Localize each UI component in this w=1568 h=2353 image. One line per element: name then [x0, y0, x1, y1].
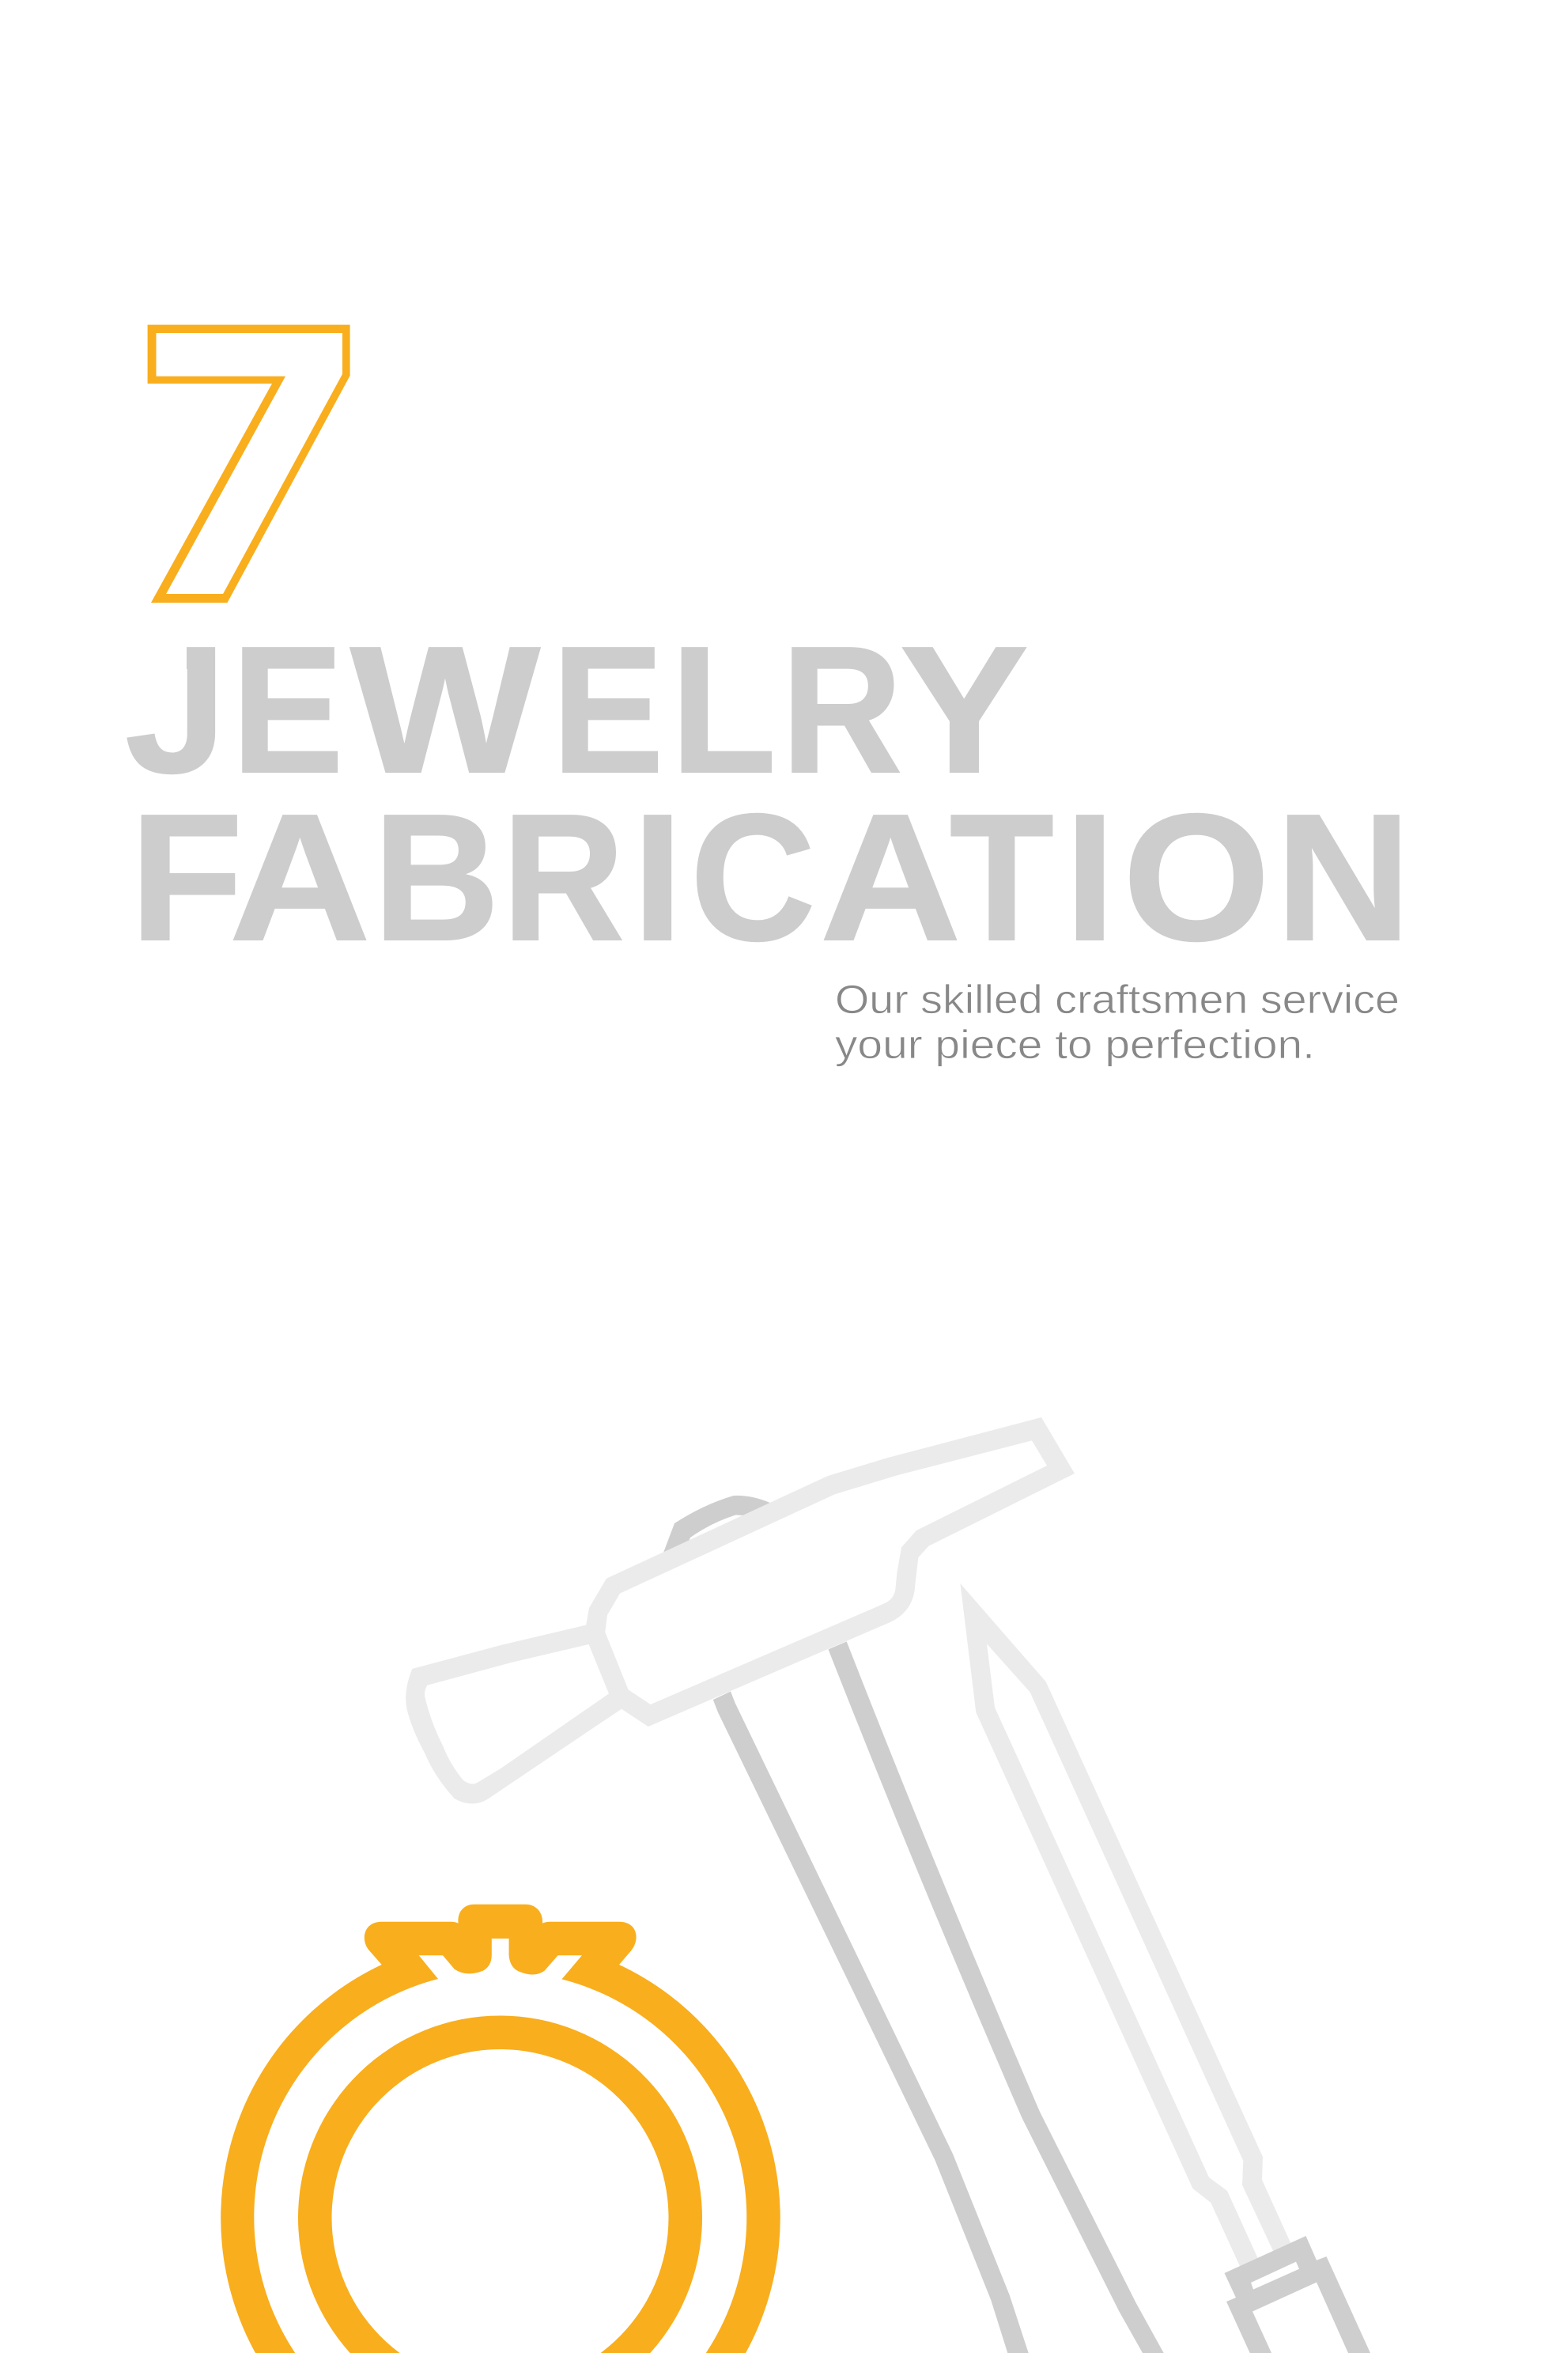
description text [835, 977, 1400, 1067]
title line: JEWELRY: Y [900, 610, 1029, 811]
title line: JEWELRY: W [350, 610, 540, 811]
title line: FABRICATION: I [1065, 777, 1115, 978]
hammer handle [713, 1641, 1164, 2353]
title line: FABRICATION: B [373, 777, 500, 978]
title line: JEWELRY: L [671, 610, 776, 811]
title line: JEWELRY: E [232, 610, 343, 811]
icon: hammer and file [406, 1417, 1370, 2353]
description line 1: Our skilled craftsmen service [835, 977, 1400, 1022]
title line: FABRICATION: F [130, 777, 243, 978]
title line: JEWELRY: J [125, 610, 227, 811]
title line: FABRICATION: O [1123, 777, 1270, 978]
hammer claw [663, 1496, 775, 1566]
title line: JEWELRY: R [781, 610, 902, 811]
step number 7 outline [148, 325, 350, 603]
ring outer band with setting [221, 1905, 780, 2353]
title line: FABRICATION: T [950, 777, 1054, 978]
title line: FABRICATION [130, 777, 1411, 978]
hammer head interior [605, 1440, 1047, 1704]
title line: FABRICATION: C [690, 777, 815, 978]
title line: FABRICATION: N [1275, 777, 1411, 978]
file ferrule [1224, 2236, 1370, 2353]
file blade [960, 1583, 1291, 2267]
title line: FABRICATION: A [820, 777, 961, 978]
title line: FABRICATION: A [229, 777, 370, 978]
title line: JEWELRY [125, 610, 1029, 811]
hammer peen interior [425, 1644, 609, 1784]
hammer head [406, 1417, 1075, 1803]
description line 2: your piece to perfection. [835, 1022, 1315, 1067]
title line: FABRICATION: I [633, 777, 682, 978]
title line: JEWELRY: E [552, 610, 663, 811]
icon: ring [221, 1905, 780, 2353]
title line: FABRICATION: R [502, 777, 625, 978]
ring inner band [298, 2015, 702, 2353]
